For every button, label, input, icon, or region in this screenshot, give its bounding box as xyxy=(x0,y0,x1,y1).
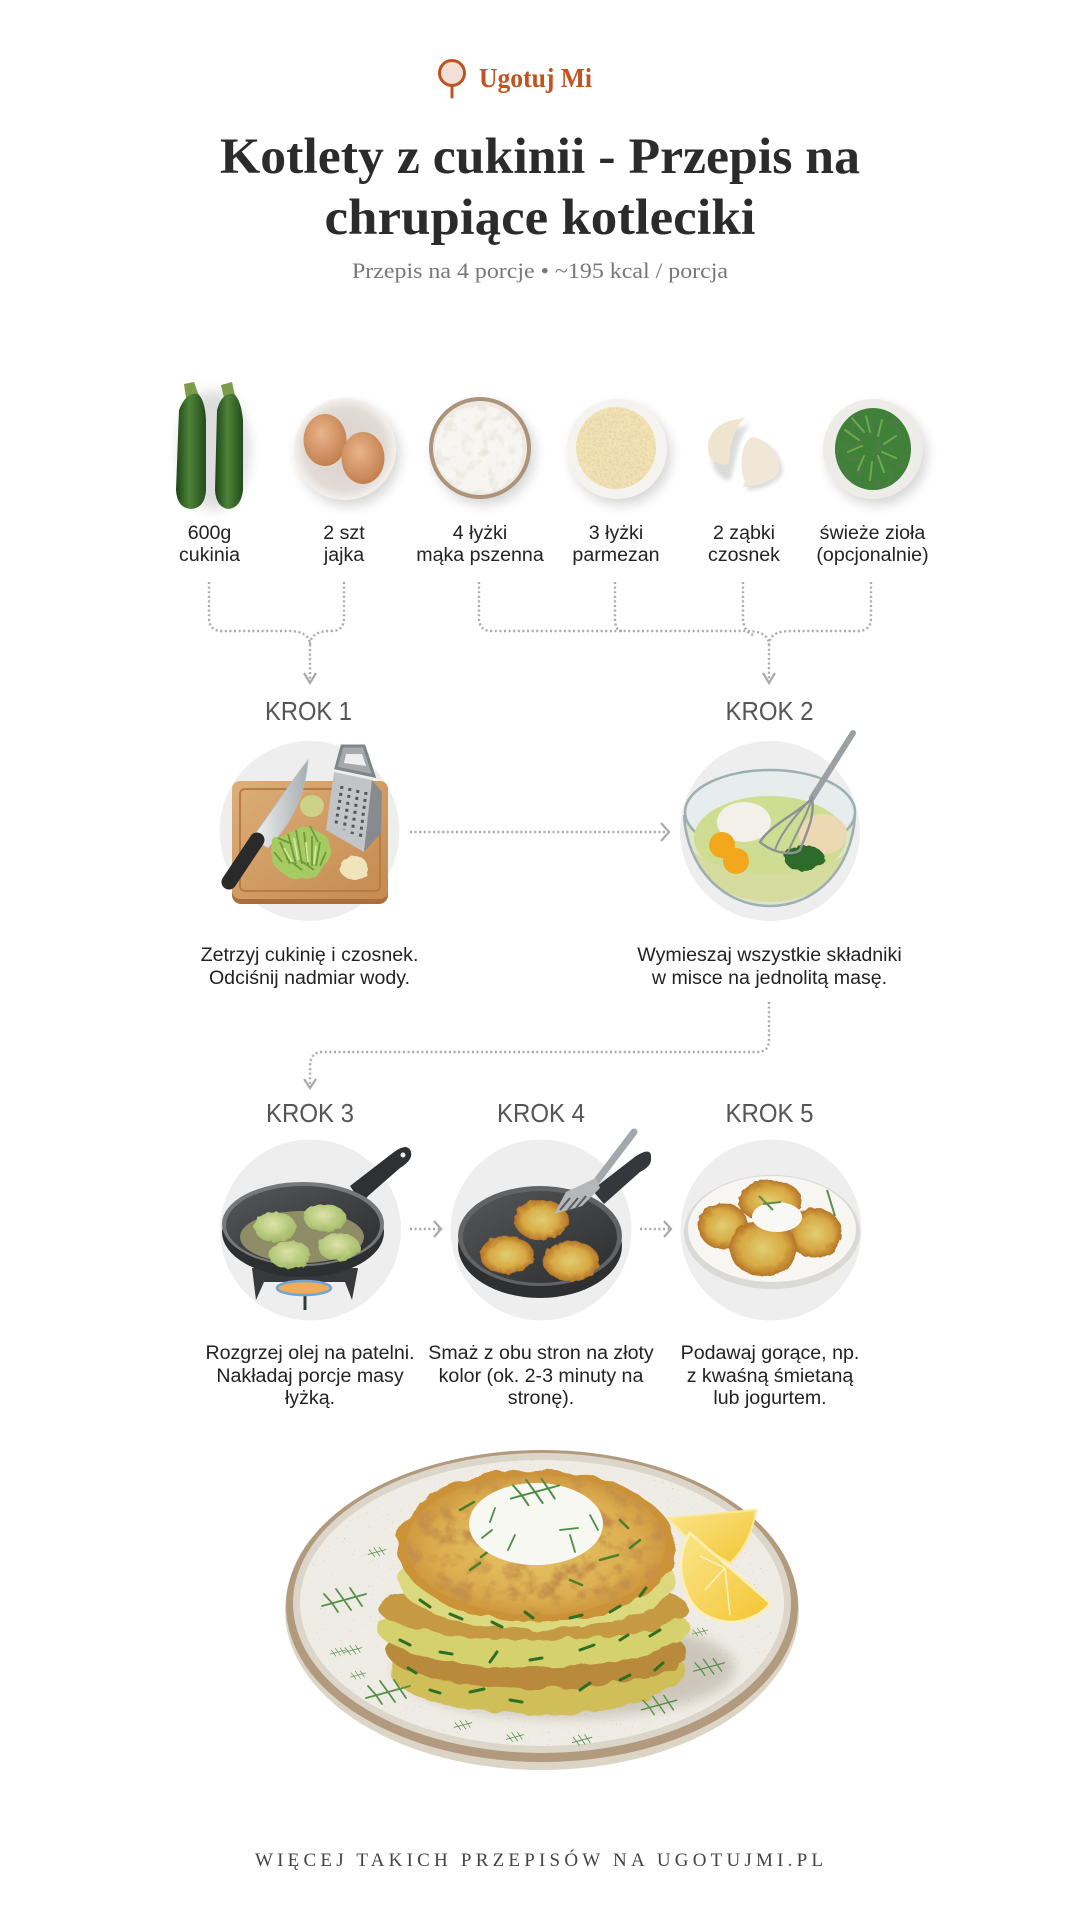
arrow: ingredients to step 2 xyxy=(479,582,871,683)
step 5 illustration: served plate xyxy=(680,1140,862,1320)
ingredient label: parmesan xyxy=(572,522,660,566)
lemon wedges xyxy=(668,1510,770,1622)
step 2 description: Wymieszaj wszystkie składniki xyxy=(637,944,902,966)
ingredient: flour xyxy=(429,397,535,505)
fritter stack xyxy=(377,1470,735,1718)
arrow: step 4 to step 5 xyxy=(640,1221,671,1237)
ingredient label: parmesan: 3 łyżki xyxy=(589,522,643,544)
step 3 heading: KROK 3 xyxy=(266,1100,354,1128)
ingredient label: zucchini xyxy=(179,522,240,566)
ingredient label: garlic: czosnek xyxy=(708,544,780,566)
ingredient label: flour: mąka pszenna xyxy=(416,544,544,566)
arrow: step 1 to step 2 xyxy=(410,823,669,841)
step 1 description: Zetrzyj cukinię i czosnek. xyxy=(201,944,418,966)
step 2 description: w misce na jednolitą masę. xyxy=(651,967,887,989)
dill sprinkles xyxy=(322,1547,724,1745)
step 3 description xyxy=(205,1342,415,1409)
ingredient label: flour xyxy=(416,522,544,566)
step 4 illustration: frying with spatula xyxy=(450,1132,651,1320)
title: chrupiące kotleciki xyxy=(324,189,756,245)
ingredient: eggs xyxy=(294,398,400,506)
ingredient label: garlic xyxy=(708,522,780,566)
step 1 description: Odciśnij nadmiar wody. xyxy=(209,967,410,989)
step 5 description xyxy=(681,1342,859,1409)
step 5 description: lub jogurtem. xyxy=(713,1387,827,1409)
step 3 illustration: pan on burner xyxy=(220,1140,411,1320)
brand name: Ugotuj Mi xyxy=(479,63,592,93)
ingredient label: herbs: (opcjonalnie) xyxy=(816,544,929,566)
step 3 description: Nakładaj porcje masy xyxy=(216,1365,404,1387)
title: Kotlety z cukinii - Przepis na xyxy=(220,128,860,184)
subtitle: Przepis na 4 porcje • ~195 kcal / porcja xyxy=(352,258,728,283)
ingredient label: eggs: 2 szt xyxy=(323,522,365,544)
step 1 description xyxy=(201,944,418,989)
ingredient label: herbs: świeże zioła xyxy=(820,522,925,544)
hero image: zucchini fritters on a plate xyxy=(285,1450,799,1770)
arrow: ingredients to step 1 xyxy=(209,582,344,683)
step 1 illustration: knife, board and grater xyxy=(220,741,400,921)
ingredient label: zucchini: cukinia xyxy=(179,544,240,566)
step 5 description: z kwaśną śmietaną xyxy=(687,1365,853,1387)
step 2 description xyxy=(637,944,902,989)
ingredient label: herbs xyxy=(816,522,929,566)
step 5 description: Podawaj gorące, np. xyxy=(681,1342,859,1364)
step 1 heading: KROK 1 xyxy=(265,698,352,726)
step 5 heading: KROK 5 xyxy=(726,1100,814,1128)
logo xyxy=(440,60,592,97)
title xyxy=(220,128,860,245)
panel: ingredients xyxy=(176,382,929,566)
ingredient: zucchini xyxy=(176,382,250,510)
arrow: step 3 to step 4 xyxy=(410,1221,441,1237)
plate xyxy=(285,1450,799,1770)
ingredient: garlic xyxy=(708,416,782,490)
step 3 description: Rozgrzej olej na patelni. xyxy=(205,1342,415,1364)
ingredient: herbs xyxy=(823,399,927,505)
step 4 description: kolor (ok. 2-3 minuty na xyxy=(439,1365,643,1387)
step 4 description: Smaż z obu stron na złoty xyxy=(428,1342,654,1364)
ingredient label: flour: 4 łyżki xyxy=(453,522,507,544)
footer: WIĘCEJ TAKICH PRZEPISÓW NA UGOTUJMI.PL xyxy=(255,1849,823,1871)
ingredient label: zucchini: 600g xyxy=(188,522,231,544)
ingredient label: eggs xyxy=(323,522,365,566)
step 4 description: stronę). xyxy=(508,1387,574,1409)
step 2 heading: KROK 2 xyxy=(726,698,814,726)
sour cream with dill xyxy=(469,1479,603,1565)
step 3 description: łyżką. xyxy=(285,1387,335,1409)
icon: spoon logo xyxy=(440,60,464,97)
ingredient label: eggs: jajka xyxy=(323,544,364,566)
ingredient label: parmesan: parmezan xyxy=(572,544,660,566)
arrow: step 2 to step 3 xyxy=(304,1002,769,1088)
step 4 heading: KROK 4 xyxy=(497,1100,585,1128)
ingredient: parmesan xyxy=(567,399,671,505)
step 2 illustration: mixing bowl and whisk xyxy=(680,733,860,921)
ingredient label: garlic: 2 ząbki xyxy=(713,522,775,544)
step 4 description xyxy=(428,1342,654,1409)
